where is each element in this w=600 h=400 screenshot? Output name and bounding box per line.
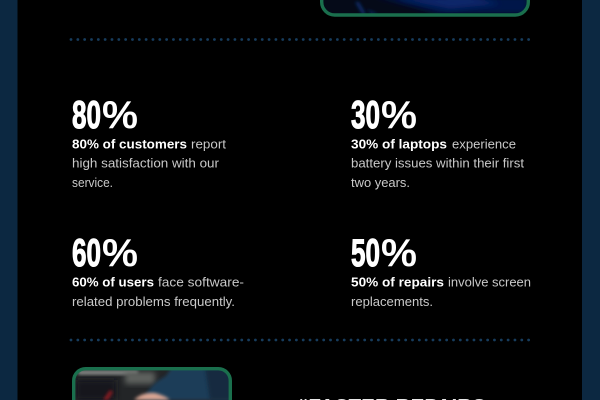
stat: 80% of customers: 80: [72, 94, 101, 137]
stat: 60% of users: 60: [72, 232, 101, 275]
photo: top framed image: [320, 0, 530, 16]
stat: 80% of customers: report: [191, 138, 227, 152]
stat: 50% of repairs: involve screen: [448, 276, 531, 290]
right side band: [582, 0, 600, 400]
stat: 80% of customers: high satisfaction with our: [72, 156, 219, 170]
stat: 30% of laptops: experience: [452, 138, 516, 152]
stat: 30% of laptops: 30: [351, 94, 380, 137]
stat: 60% of users: %: [102, 232, 138, 275]
stat: 50% of repairs: replacements.: [351, 295, 433, 309]
stat: 60% of users: face software-: [158, 276, 244, 290]
stat: 60% of users: related problems frequently.: [72, 295, 235, 309]
stat: 30% of laptops: [351, 94, 525, 190]
stat: 80% of customers: [72, 94, 227, 190]
stat: 50% of repairs: 50% of repairs: [351, 276, 444, 290]
stat: 50% of repairs: %: [381, 232, 417, 275]
stat: 30% of laptops: 30% of laptops: [351, 138, 447, 152]
stat: 30% of laptops: %: [381, 94, 417, 137]
stat: 50% of repairs: 50: [351, 232, 380, 275]
stat: 60% of users: 60% of users: [72, 276, 154, 290]
stat: 30% of laptops: battery issues within their first: [351, 156, 525, 170]
stat: 80% of customers: service.: [72, 176, 113, 190]
stat: 50% of repairs: [351, 232, 531, 309]
stat: 80% of customers: 80% of customers: [72, 138, 187, 152]
left side band: [0, 0, 18, 400]
stat: 30% of laptops: two years.: [351, 176, 410, 190]
stat: 60% of users: [72, 232, 244, 309]
stat: 80% of customers: %: [102, 94, 138, 137]
photo: bottom framed image: [72, 367, 232, 400]
